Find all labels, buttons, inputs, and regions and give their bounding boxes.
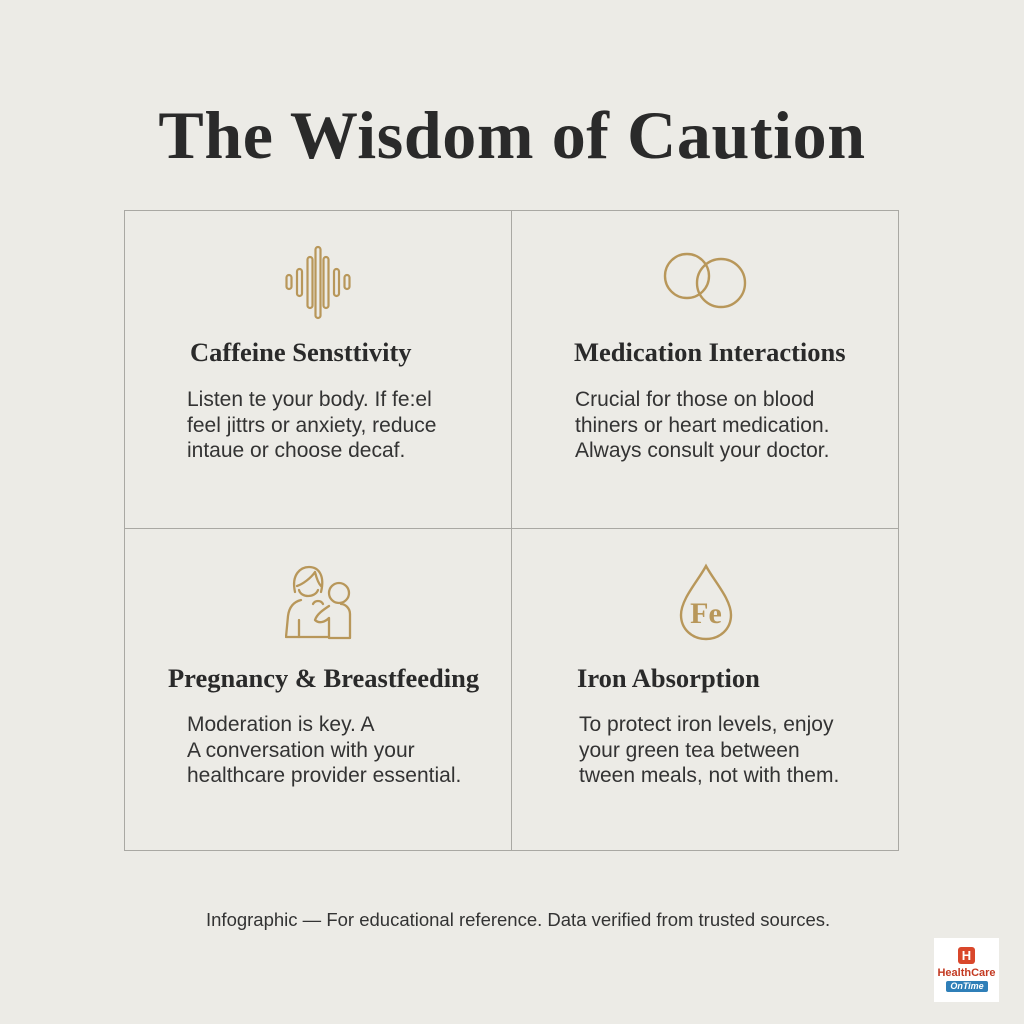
text: feel jittrs or anxiety, reduce	[187, 414, 436, 436]
grid of caution panels	[124, 210, 899, 851]
text: Always consult your doctor.	[575, 439, 829, 462]
text: A conversation with your	[187, 738, 415, 762]
text: tween meals, not with them.	[579, 764, 839, 787]
heading: Caffeine Sensttivity	[190, 337, 412, 367]
panel: pregnancy & breastfeeding	[168, 566, 479, 787]
icon: mother and child	[285, 566, 352, 640]
icon: drop with Fe: Fe	[690, 597, 722, 630]
heading: Pregnancy & Breastfeeding	[168, 663, 479, 693]
panel: caffeine sensitivity	[187, 246, 436, 462]
text: Moderation is key. A	[187, 713, 375, 736]
text	[575, 388, 829, 462]
text	[579, 713, 839, 787]
panel: medication interactions	[574, 252, 846, 462]
panel: iron absorption	[577, 564, 839, 787]
logo: OnTime	[950, 981, 984, 991]
icon: drop with Fe	[680, 564, 732, 640]
logo: H	[962, 948, 971, 963]
text	[187, 713, 461, 787]
footer note: Infographic — For educational reference. Data verified from trusted sources.	[206, 909, 830, 930]
text: Listen te your body. If fe:el	[187, 388, 432, 411]
text: your green tea between	[579, 738, 800, 762]
text: healthcare provider essential.	[187, 764, 461, 787]
text: Crucial for those on blood	[575, 388, 814, 411]
text	[187, 388, 436, 462]
icon: overlapping circles	[664, 252, 746, 308]
title: The Wisdom of Caution	[158, 97, 866, 173]
text: intaue or choose decaf.	[187, 439, 405, 462]
text: To protect iron levels, enjoy	[579, 713, 833, 736]
logo: HealthCare	[937, 967, 996, 979]
icon: sound wave	[285, 246, 351, 320]
heading: Medication Interactions	[574, 337, 846, 367]
heading: Iron Absorption	[577, 663, 760, 693]
logo	[934, 938, 999, 1002]
text: thiners or heart medication.	[575, 414, 829, 436]
